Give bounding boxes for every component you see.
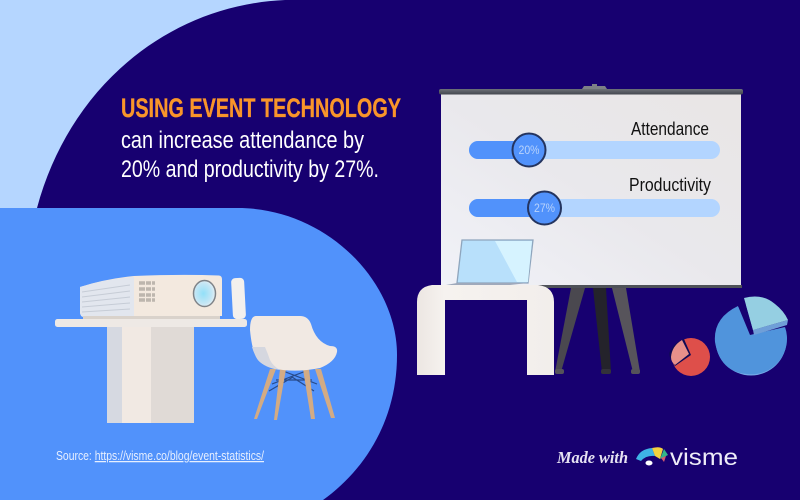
blue panel — [0, 208, 397, 500]
pie body top — [715, 306, 787, 374]
chair legs — [254, 369, 335, 420]
laptop — [446, 240, 533, 285]
title — [121, 93, 401, 183]
chair cross braces — [269, 371, 317, 391]
desk top — [55, 319, 247, 327]
projector vents — [80, 277, 134, 317]
tripod — [555, 288, 640, 374]
chair — [250, 316, 337, 420]
screen surface — [441, 93, 741, 287]
projector body — [80, 275, 222, 316]
pie slice edge — [753, 320, 788, 335]
visme wordmark: visme — [670, 444, 738, 470]
label attendance: Attendance — [631, 119, 709, 139]
heading: USING EVENT TECHNOLOGY — [121, 93, 401, 123]
attendance bar: 20% — [518, 143, 540, 157]
screen top rod — [439, 89, 743, 94]
projector lens — [194, 280, 216, 306]
desk column — [107, 327, 194, 423]
source: Source: https://visme.co/blog/event-statistics/ — [56, 449, 264, 463]
productivity bar: 27% — [534, 201, 555, 215]
chair seat — [250, 316, 337, 371]
attendance bar — [469, 134, 720, 166]
productivity bar — [469, 192, 720, 224]
large pie chart — [715, 296, 788, 376]
screen knob — [582, 84, 607, 89]
small pie chart — [669, 338, 710, 376]
made with script: Made with — [556, 448, 628, 467]
light blue corner shape — [0, 0, 285, 208]
notch shadow — [738, 298, 786, 335]
subheading line 1: can increase attendance by — [121, 127, 364, 154]
subheading line 2: 20% and productivity by 27%. — [121, 156, 379, 183]
pie slice — [744, 296, 788, 330]
projector base — [83, 316, 220, 319]
screen bottom bar — [441, 285, 742, 288]
made with visme logo — [556, 444, 738, 470]
remote — [231, 278, 246, 319]
label productivity: Productivity — [629, 175, 711, 195]
projector on desk — [55, 275, 247, 423]
pie body edge — [716, 304, 786, 376]
projector keypad — [139, 283, 155, 300]
chair seat shadow — [252, 347, 280, 370]
visme mark — [636, 447, 668, 466]
bench — [417, 285, 554, 375]
projection screen — [439, 84, 743, 288]
